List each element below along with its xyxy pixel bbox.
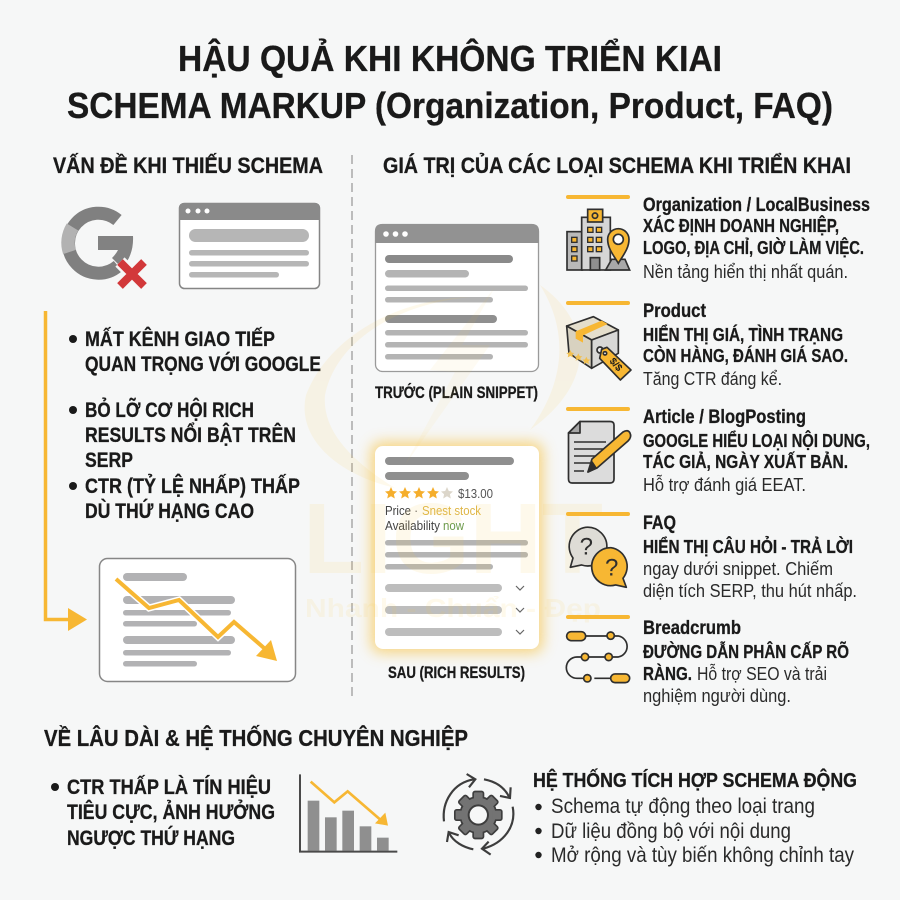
text: breadcrumb: RÀNG.	[643, 663, 692, 684]
dynamic schema system text: Dữ liệu đồng bộ với nội dung	[551, 820, 791, 843]
label: after: SAU (RICH RESULTS)	[388, 663, 525, 682]
text: article: TÁC GIẢ, NGÀY XUẤT BẢN.	[643, 451, 848, 472]
text: article: Article / BlogPosting	[643, 407, 806, 428]
problem bullet list: RESULTS NỔI BẬT TRÊN	[85, 423, 296, 447]
panel: after, rich results: Snest stock	[422, 503, 481, 518]
panel: after, rich results: ·	[414, 503, 418, 518]
arrow: problems to chart	[46, 311, 87, 631]
problem bullet list: CTR (TỶ LỆ NHẤP) THẤP	[85, 474, 300, 498]
title	[67, 37, 833, 126]
text: article: Hỗ trợ đánh giá EEAT.	[643, 474, 806, 495]
text: breadcrumb	[643, 618, 849, 706]
text: breadcrumb: ĐƯỜNG DẪN PHÂN CẤP RÕ	[643, 641, 849, 662]
dynamic schema system text	[533, 768, 857, 867]
text: breadcrumb: Breadcrumb	[643, 618, 741, 639]
text: product	[643, 301, 848, 389]
panel: after, rich results: Price	[385, 503, 411, 518]
icon: product box with price tag	[566, 317, 631, 380]
icon: product box with price tag: $/$	[607, 356, 624, 374]
star rating	[385, 487, 453, 498]
text: organization: XÁC ĐỊNH DOANH NGHIỆP,	[643, 215, 839, 236]
icon: gear with cycle arrows	[444, 774, 513, 855]
dynamic schema system text: HỆ THỐNG TÍCH HỢP SCHEMA ĐỘNG	[533, 768, 857, 792]
icon: document and pencil	[568, 422, 631, 483]
icon: FAQ speech bubbles: ?	[580, 534, 593, 561]
text: article	[643, 407, 870, 495]
text: product: CÒN HÀNG, ĐÁNH GIÁ SAO.	[643, 345, 848, 366]
heading: long term: VỀ LÂU DÀI & HỆ THỐNG CHUYÊN NGHIỆP	[44, 724, 468, 751]
chart: falling CTR over result card	[100, 558, 296, 682]
watermark logo: Nhanh - Chuẩn - Đẹp	[305, 593, 601, 623]
dynamic schema system text: Schema tự động theo loại trang	[551, 795, 815, 818]
panel: after, rich results: Availability	[385, 518, 440, 533]
text: FAQ: diện tích SERP, thu hút nhấp.	[643, 581, 857, 601]
watermark logo: LIGHT	[303, 483, 603, 595]
label: before: TRƯỚC (PLAIN SNIPPET)	[375, 383, 538, 402]
icon: plain browser window	[179, 203, 320, 288]
long term bullet: CTR THẤP LÀ TÍN HIỆU	[67, 775, 271, 799]
text: breadcrumb: nghiệm người dùng.	[643, 686, 791, 706]
text: FAQ	[643, 513, 857, 601]
problem bullet list: MẤT KÊNH GIAO TIẾP	[85, 327, 275, 351]
text: FAQ: ngay dưới snippet. Chiếm	[643, 559, 833, 579]
long term bullet: NGƯỢC THỨ HẠNG	[67, 826, 235, 850]
text: product: HIỂN THỊ GIÁ, TÌNH TRẠNG	[643, 324, 843, 345]
panel: after, rich results: $13.00	[458, 486, 493, 501]
dynamic schema system text: Mở rộng và tùy biến không chỉnh tay	[551, 844, 854, 867]
panel: after, rich results	[371, 442, 543, 653]
heading: schema values: GIÁ TRỊ CỦA CÁC LOẠI SCHEMA KHI TRIỂN KHAI	[383, 153, 851, 178]
text: breadcrumb: Hỗ trợ SEO và trải	[697, 663, 827, 684]
icon: google crossed out	[68, 213, 144, 286]
problem bullet list: BỎ LỠ CƠ HỘI RICH	[85, 398, 254, 422]
panel: after, rich results: now	[443, 518, 465, 533]
text: product: Product	[643, 301, 707, 322]
icon: building and map pin	[567, 209, 630, 270]
long term bullet	[51, 775, 275, 850]
watermark logo	[303, 285, 603, 623]
heading: problems: VẤN ĐỀ KHI THIẾU SCHEMA	[53, 153, 323, 178]
text: organization: Nền tảng hiển thị nhất quán.	[643, 262, 848, 282]
icon: breadcrumb path	[566, 632, 630, 683]
panel: before, plain snippet	[375, 224, 539, 372]
long term bullet: TIÊU CỰC, ẢNH HƯỞNG	[67, 800, 275, 824]
text: organization	[643, 195, 870, 282]
icon: FAQ speech bubbles	[569, 527, 627, 587]
text: FAQ: FAQ	[643, 513, 676, 534]
problem bullet list: DÙ THỨ HẠNG CAO	[85, 499, 254, 523]
problem bullet list	[69, 327, 321, 523]
problem bullet list: SERP	[85, 449, 133, 472]
text: FAQ: HIỂN THỊ CÂU HỎI - TRẢ LỜI	[643, 536, 853, 557]
icon: declining bar chart	[300, 774, 397, 852]
title: SCHEMA MARKUP (Organization, Product, FAQ)	[67, 85, 833, 126]
icon: FAQ speech bubbles: ?	[605, 554, 618, 581]
problem bullet list: QUAN TRỌNG VỚI GOOGLE	[85, 352, 321, 376]
text: product: Tăng CTR đáng kể.	[643, 369, 782, 389]
title: HẬU QUẢ KHI KHÔNG TRIỂN KIAI	[178, 37, 722, 79]
